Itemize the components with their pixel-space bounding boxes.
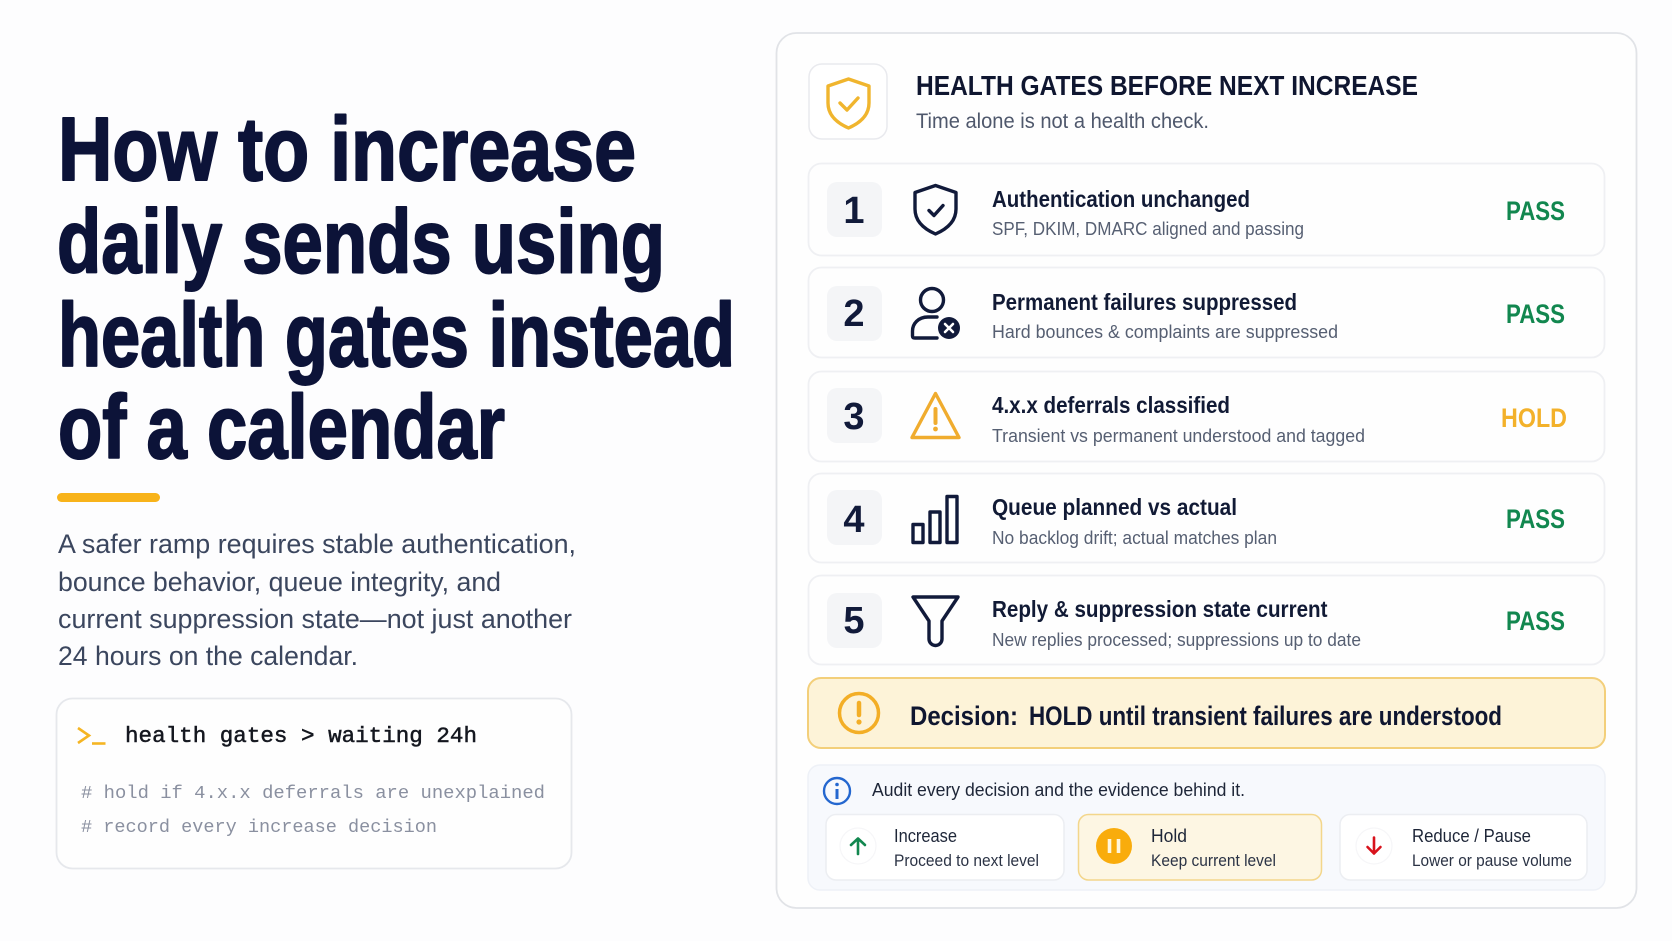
intro paragraph: 24 hours on the calendar. <box>58 641 358 671</box>
gate 5 <box>808 576 1604 664</box>
gate 2: 2 <box>843 293 865 335</box>
legend: increase: Increase <box>894 825 957 846</box>
icon: terminal prompt <box>78 728 106 744</box>
gate 2: Permanent failures suppressed <box>992 289 1297 315</box>
icon: alert circle <box>840 694 878 732</box>
gate 3: 3 <box>843 396 865 438</box>
gate 3: 4.x.x deferrals classified <box>992 392 1230 418</box>
headline: of a calendar <box>58 378 505 478</box>
decision banner <box>808 678 1605 748</box>
gate 5: New replies processed; suppressions up to date <box>992 630 1361 650</box>
icon: amber shield <box>809 64 887 139</box>
gate 1: Authentication unchanged <box>992 186 1250 212</box>
legend: reduce or pause: Lower or pause volume <box>1412 852 1572 870</box>
gate 4: No backlog drift; actual matches plan <box>992 528 1277 548</box>
gate 3: Transient vs permanent understood and tagged <box>992 426 1365 446</box>
decision text: Decision: <box>910 701 1018 731</box>
gate 4 <box>808 474 1604 562</box>
panel subheading: Time alone is not a health check. <box>916 110 1209 133</box>
panel: health gates <box>776 33 1636 908</box>
gate 2: Hard bounces & complaints are suppressed <box>992 322 1338 342</box>
headline: How to increase <box>58 100 636 200</box>
gate 5: PASS <box>1506 606 1565 636</box>
headline: daily sends using <box>57 192 665 292</box>
gate 4: 4 <box>843 499 865 541</box>
gate 4: Queue planned vs actual <box>992 494 1237 520</box>
intro paragraph <box>58 529 576 671</box>
gate 5: 5 <box>843 600 865 642</box>
audit panel <box>808 765 1605 890</box>
icon: bar chart <box>913 496 957 542</box>
code comments: # record every increase decision <box>81 816 437 838</box>
audit note: Audit every decision and the evidence behind it. <box>872 779 1245 800</box>
code comments <box>81 782 545 838</box>
gate 5: Reply & suppression state current <box>992 596 1328 622</box>
legend: hold: Keep current level <box>1151 852 1276 870</box>
legend: increase <box>826 814 1064 880</box>
icon: user with x badge <box>912 288 960 339</box>
gate 1: 1 <box>843 190 865 232</box>
panel heading: HEALTH GATES BEFORE NEXT INCREASE <box>916 70 1418 101</box>
headline <box>57 100 735 478</box>
legend: hold: Hold <box>1151 825 1187 846</box>
gate 4: PASS <box>1506 504 1565 534</box>
decision text: HOLD until transient failures are understood <box>1029 701 1502 731</box>
gate 3 <box>808 372 1604 462</box>
icon: warning triangle <box>912 394 959 438</box>
legend: reduce or pause: Reduce / Pause <box>1412 825 1531 846</box>
code command: health gates > waiting 24h <box>125 723 477 749</box>
gate 1: SPF, DKIM, DMARC aligned and passing <box>992 219 1304 239</box>
accent bar <box>57 493 160 502</box>
decision text <box>910 701 1502 731</box>
legend: hold <box>1078 814 1322 880</box>
code comments: # hold if 4.x.x deferrals are unexplained <box>81 782 545 804</box>
intro paragraph: A safer ramp requires stable authentication, <box>58 529 576 559</box>
gate 3: HOLD <box>1501 403 1567 433</box>
icon: funnel <box>913 597 958 646</box>
intro paragraph: current suppression state—not just another <box>58 604 572 634</box>
intro paragraph: bounce behavior, queue integrity, and <box>58 567 501 597</box>
headline: health gates instead <box>58 286 735 386</box>
code panel <box>56 698 572 868</box>
icon: info <box>824 778 850 804</box>
legend: reduce or pause <box>1340 814 1587 880</box>
gate 1: PASS <box>1506 196 1565 226</box>
icon: shield check <box>915 186 956 234</box>
legend: increase: Proceed to next level <box>894 852 1039 870</box>
gate 1 <box>808 164 1604 256</box>
gate 2: PASS <box>1506 299 1565 329</box>
gate 2 <box>808 268 1604 358</box>
